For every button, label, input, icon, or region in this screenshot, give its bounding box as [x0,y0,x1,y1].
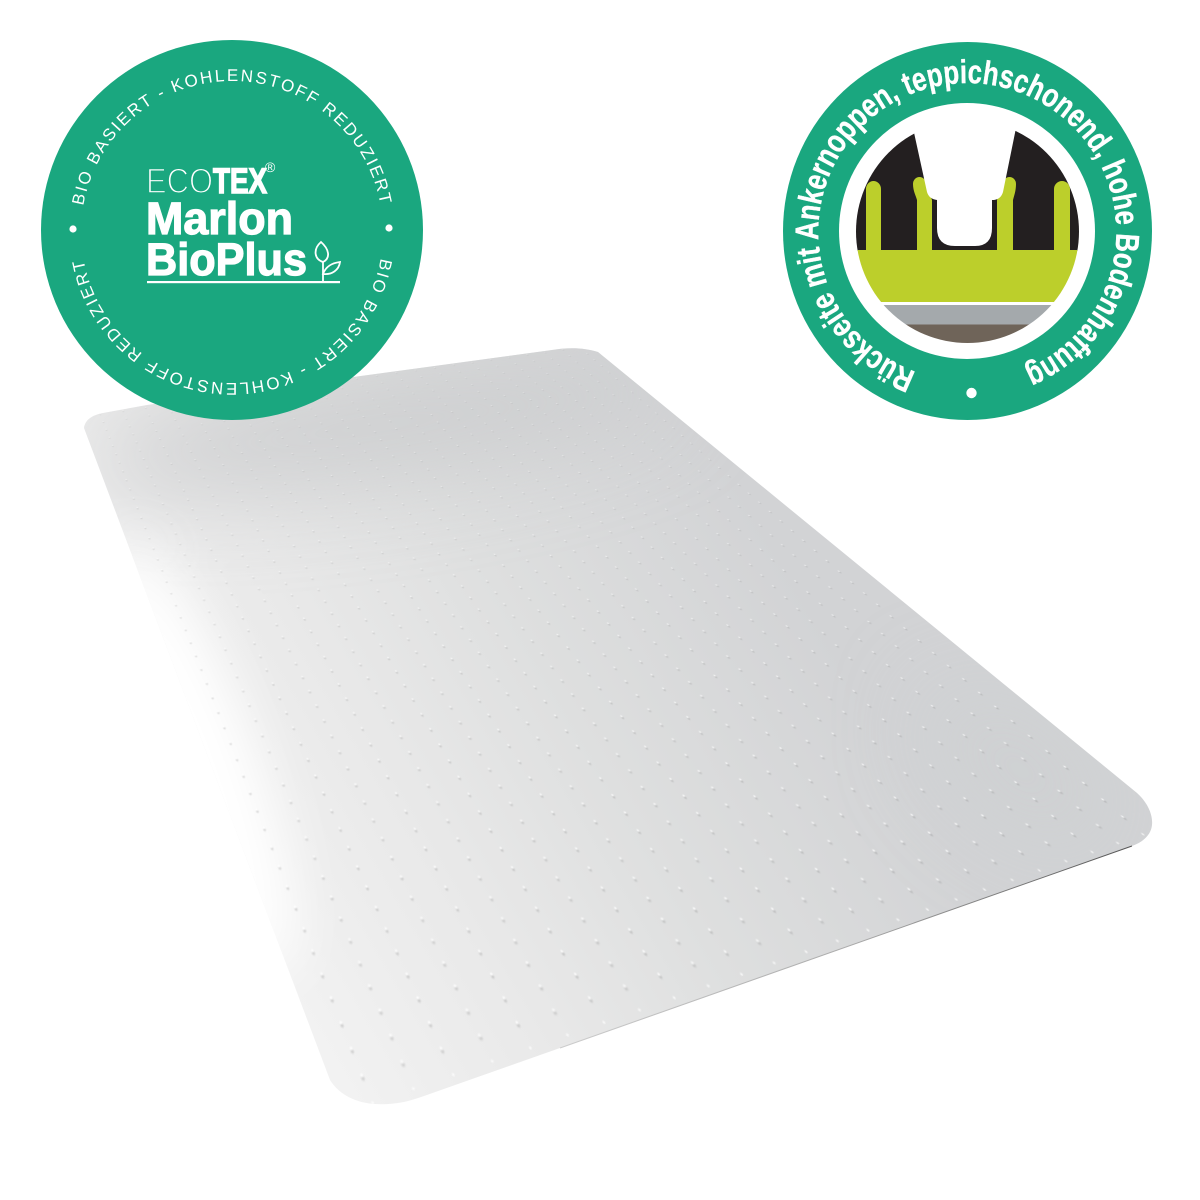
ring text bottom: BIO BASIERT - KOHLENSTOFF REDUZIERT [72,260,392,395]
ring text top: BIO BASIERT - KOHLENSTOFF REDUZIERT [72,69,392,204]
chair foot [911,118,1020,246]
logo: BioPlus: BioPlus [146,234,307,285]
inner white disc [839,103,1095,359]
product: transparent floor mat [84,348,1152,1104]
mat body and studs [850,177,1090,302]
logo underline [147,281,340,283]
logo: ECOTEX: TEX [213,162,268,201]
floor: grey layer [884,305,1052,324]
carpet pile [856,130,1079,251]
logo: ECOTEX: ® [265,159,276,175]
badge: Ecotex Marlon BioPlus [41,40,423,420]
mat studs: perspective dot lattice [100,350,1145,1104]
ring separator dot left [69,225,77,233]
logo: ECOTEX: ECO [146,162,213,201]
badge disc [41,40,423,420]
logo: Marlon: Marlon [146,193,293,244]
icon: sprout [316,242,340,282]
floor: brown layer [906,324,1029,343]
logo: ECOTEX [146,159,276,201]
ring disc [783,42,1152,420]
badges layer [41,40,1152,420]
diagram: stud cross-section [856,130,1079,343]
badge: anchor studs cross-section [783,42,1152,420]
ring separator dot [966,388,977,398]
ring text: Rückseite mit Ankernoppen, teppichschonend, hohe Bodenhaftung [795,58,1140,393]
ring separator dot right [385,224,393,232]
